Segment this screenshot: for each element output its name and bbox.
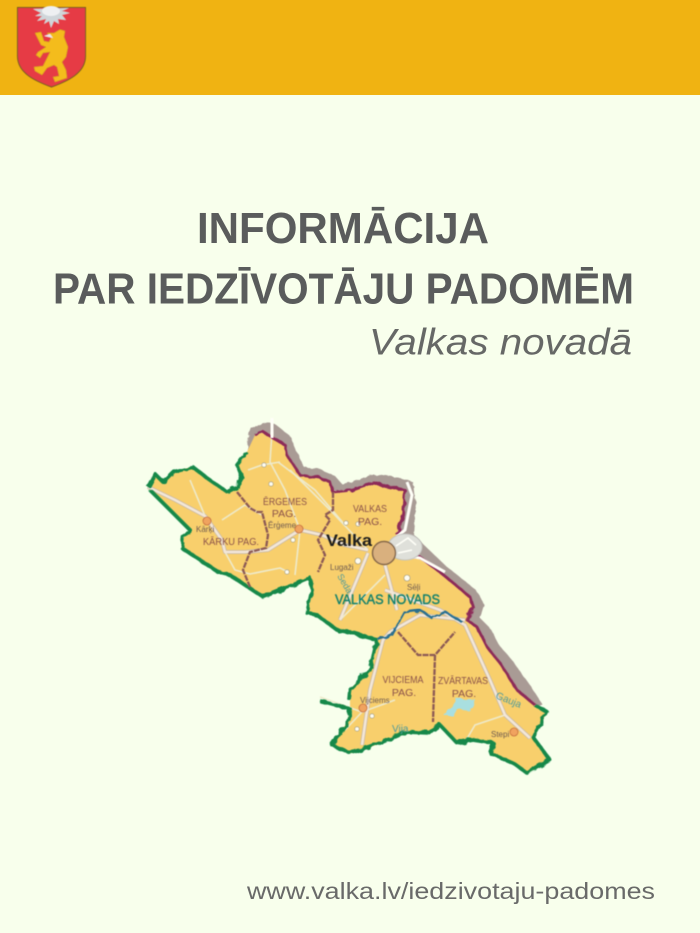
map of Valka municipality: Seda <box>335 572 354 595</box>
map labels: ZVĀRTAVAS <box>438 675 488 687</box>
website url: www.valka.lv/iedzivotaju-padomes <box>246 878 655 904</box>
label: Valkas novads: VALKAS NOVADS <box>335 591 440 607</box>
map of Valka municipality: Ērģeme <box>268 521 297 530</box>
map shadow <box>247 422 542 708</box>
green border <box>148 452 550 773</box>
map labels: PAG. <box>272 508 296 520</box>
map labels: PAG. <box>358 516 382 528</box>
label: Valka city: Valka <box>326 531 373 550</box>
map of Valka municipality <box>148 418 550 773</box>
settlement markers <box>203 517 518 736</box>
map labels: PAG. <box>452 688 476 700</box>
road casing <box>148 487 530 745</box>
roads <box>148 432 530 745</box>
map of Valka municipality: Vija <box>392 724 409 735</box>
parish boundaries <box>237 492 455 722</box>
map of Valka municipality: Kārķi <box>196 525 214 534</box>
subtitle: Valkas novadā <box>369 322 632 362</box>
purple border <box>255 432 535 705</box>
map labels: ĒRGEMES <box>263 496 307 508</box>
river Gauja border section <box>378 610 462 640</box>
title: INFORMĀCIJA <box>197 204 489 253</box>
title <box>53 204 634 314</box>
map of Valka municipality: Gauja <box>494 691 523 711</box>
map labels: KĀRKU PAG. <box>203 536 259 548</box>
lakes <box>444 698 475 716</box>
title: PAR IEDZĪVOTĀJU PADOMĒM <box>53 264 634 314</box>
white river strip <box>272 418 445 572</box>
map labels: PAG. <box>392 687 416 699</box>
map of Valka municipality: Lugaži <box>330 563 354 572</box>
map labels: VIJCIEMA <box>382 674 424 686</box>
map labels: VALKAS <box>353 503 387 515</box>
map of Valka municipality: Vijciems <box>360 696 390 705</box>
map labels <box>203 496 488 700</box>
map of Valka municipality: Sēļi <box>407 583 421 592</box>
map of Valka municipality: Stepi <box>491 730 509 739</box>
icon: coat of arms shield <box>18 6 86 87</box>
map land area <box>148 432 550 773</box>
city area Valka <box>372 534 422 564</box>
header band <box>0 0 700 95</box>
